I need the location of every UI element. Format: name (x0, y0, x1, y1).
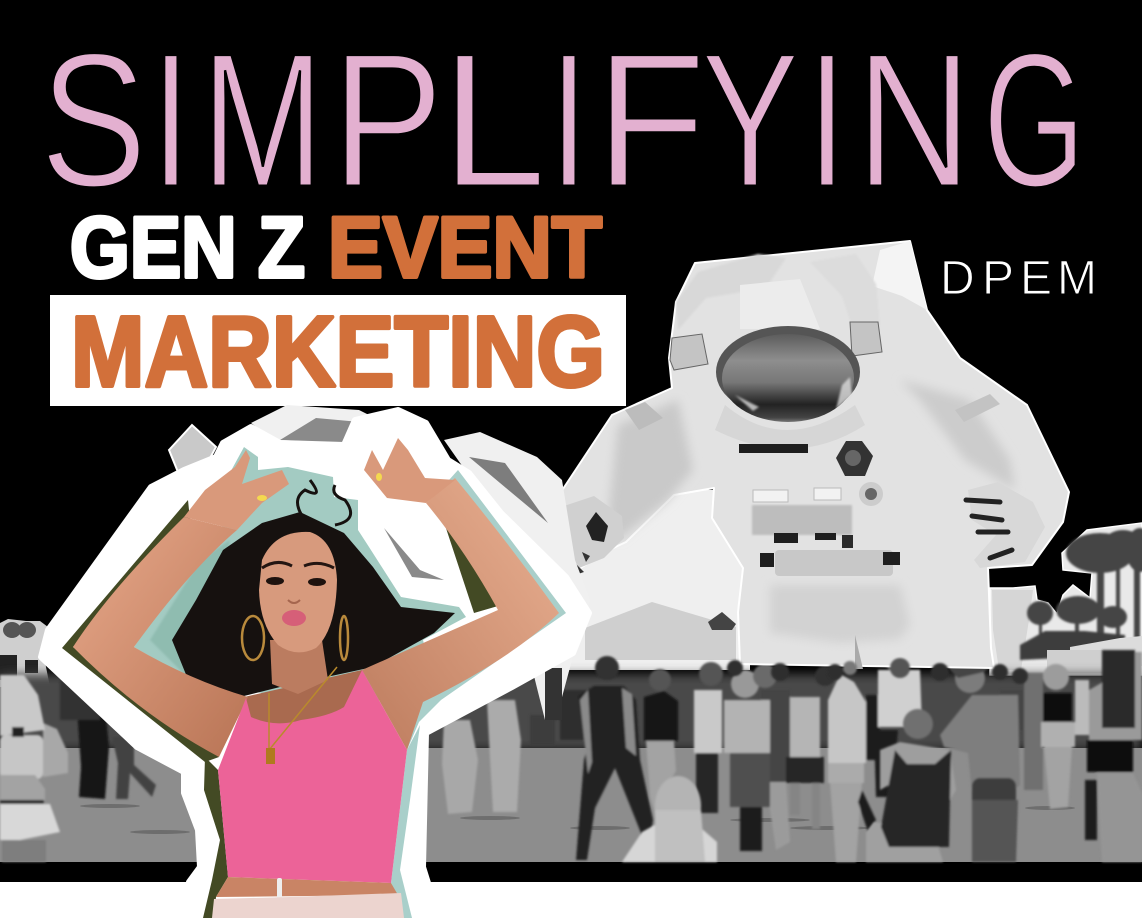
logo: DPEM: D (940, 252, 975, 305)
right hand (364, 438, 455, 503)
left arm (73, 517, 248, 757)
title: SIMPLIFYING: I (807, 13, 847, 227)
inflatable piece seen through sticker (384, 528, 444, 580)
white sticker outline (41, 410, 589, 918)
teal halo around hair (134, 447, 466, 700)
navel piercing (277, 878, 282, 900)
heading: GEN Z EVENT: GEN Z (70, 200, 305, 296)
dark man with open shirt (576, 656, 653, 860)
visor ring (716, 326, 860, 418)
left glove (552, 496, 624, 582)
inflatable piece top (251, 405, 373, 445)
title: SIMPLIFYING: P (332, 14, 444, 227)
visor (722, 334, 854, 422)
inflatable piece right (444, 432, 590, 720)
heading: MARKETING on white panel: MARKETING (71, 296, 605, 408)
title: SIMPLIFYING: L (440, 14, 547, 227)
teal halo darker patch (150, 540, 230, 680)
teal edge along right of body (391, 725, 420, 918)
left background trees (0, 619, 50, 687)
seated blonde woman in foreground (622, 776, 717, 862)
heading: GEN Z EVENT (70, 200, 602, 296)
title: SIMPLIFYING: S (40, 14, 147, 227)
chest (244, 670, 395, 745)
crowd people: right group (866, 650, 1142, 862)
collar (715, 405, 865, 449)
title: SIMPLIFYING: N (856, 14, 972, 227)
right glove (966, 482, 1045, 568)
white tree (992, 590, 1033, 670)
earrings (242, 616, 348, 660)
crowd band (0, 674, 1142, 750)
crowd people: centre group (442, 651, 922, 862)
necklace (266, 667, 337, 764)
shoulder and arm shading (608, 400, 693, 540)
title: SIMPLIFYING: F (595, 14, 706, 227)
face (259, 532, 337, 652)
title: SIMPLIFYING: I (151, 13, 191, 227)
pink crop top (218, 670, 407, 883)
crowd people: left group (0, 675, 156, 862)
backpack (872, 241, 927, 310)
logo: DPEM: P (982, 252, 1014, 305)
festival crowd photo (0, 490, 1142, 862)
heading: GEN Z EVENT: EVENT (328, 200, 602, 296)
chest details (739, 441, 900, 576)
title: SIMPLIFYING: Y (701, 15, 799, 227)
olive shadow inside right arm (440, 510, 498, 613)
title: SIMPLIFYING: I (549, 13, 589, 227)
sky and tent (560, 490, 750, 670)
olive shadow along left arm (62, 500, 219, 762)
standing man with cap (940, 660, 1020, 862)
right arm (362, 478, 559, 750)
bare midriff (216, 877, 398, 897)
logo: DPEM (940, 252, 1097, 305)
logo: DPEM: M (1057, 252, 1097, 305)
loose curls above hair (298, 480, 351, 525)
helmet shading (676, 254, 786, 330)
shoulder patches (625, 402, 663, 430)
inflatable astronaut (547, 241, 1069, 669)
trousers (212, 893, 404, 918)
inflatable piece left (169, 425, 216, 477)
logo: DPEM: E (1020, 252, 1052, 305)
kneeling man in tank top (866, 709, 956, 862)
lower suit shading (770, 585, 910, 643)
left hand (184, 450, 289, 530)
crowd heads in front of astronaut (727, 658, 1028, 684)
visor highlights (735, 377, 852, 411)
hair (172, 512, 455, 703)
silhouette (547, 241, 1069, 668)
neck (270, 640, 328, 694)
title: SIMPLIFYING: M (201, 15, 324, 227)
title: SIMPLIFYING (40, 13, 1086, 227)
helmet clamps (670, 334, 708, 370)
girl cut-out (41, 410, 589, 918)
bottom white band (0, 882, 1142, 918)
olive shadow along left of body (203, 757, 228, 918)
white inflatable behind the girl (169, 405, 590, 720)
grass (0, 748, 1142, 862)
teal edge along right arm (395, 470, 566, 750)
right background sky and palm trees (990, 523, 1142, 675)
title: SIMPLIFYING: G (983, 13, 1086, 227)
